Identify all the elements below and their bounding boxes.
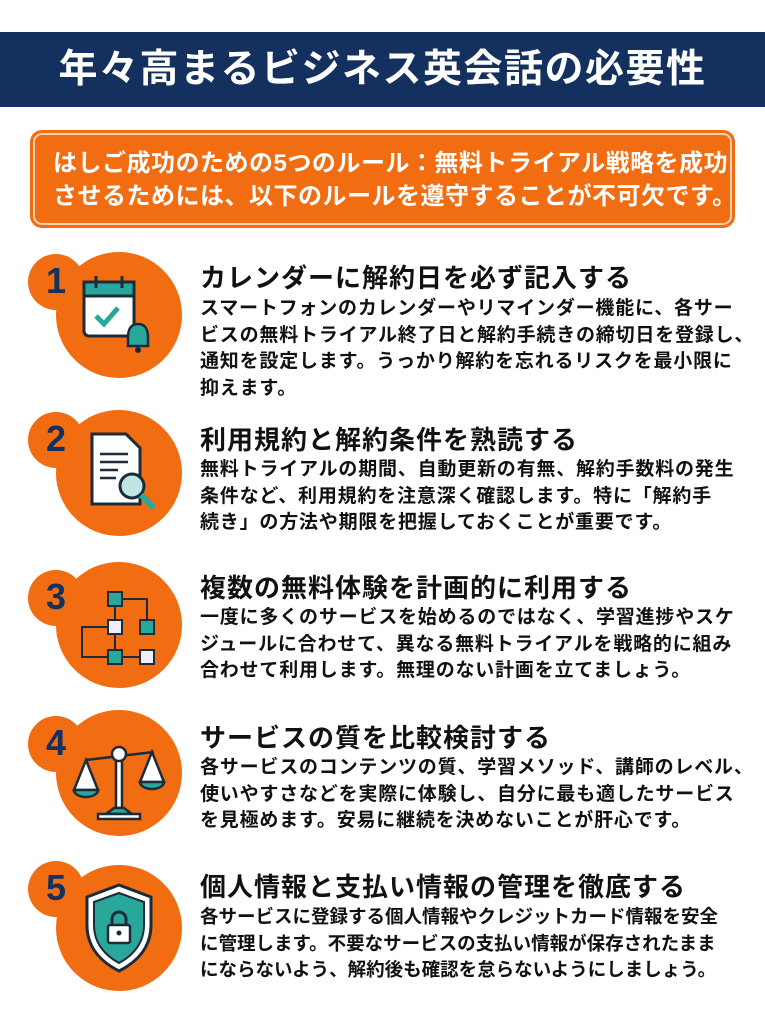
number 1: [28, 254, 84, 310]
body 2: 続き」の方法や期限を把握しておくことが重要です。: [200, 512, 672, 533]
icon: calendar: [82, 276, 150, 353]
icon: shield lock: [86, 883, 152, 973]
number 5: 5: [46, 867, 66, 908]
icon circle 1: [56, 252, 182, 378]
body 3: 合わせて利用します。無理のない計画を立てましょう。: [200, 660, 691, 681]
item 4: [28, 710, 754, 836]
body 3: ジュールに合わせて、異なる無料トライアルを戦略的に組み: [200, 634, 732, 654]
icon circle 3: [56, 562, 182, 688]
body 3: [200, 606, 735, 681]
icon circle 4: [56, 710, 182, 836]
body 2: [200, 458, 734, 533]
icon: scale: [72, 746, 166, 820]
intro callout: [30, 130, 735, 228]
intro callout: させるためには、以下のルールを遵守することが不可欠です。: [53, 183, 737, 210]
heading 4: サービスの質を比較検討する: [200, 723, 551, 753]
number 1: 1: [46, 260, 66, 301]
item 3: [28, 562, 735, 688]
item 5: [28, 861, 718, 991]
number 3: 3: [46, 576, 66, 617]
body 2: 条件など、利用規約を注意深く確認します。特に「解約手: [200, 486, 712, 506]
body 1: ビスの無料トライアル終了日と解約手続きの締切日を登録し、: [200, 324, 754, 346]
body 1: 通知を設定します。うっかり解約を忘れるリスクを最小限に: [200, 351, 733, 372]
title: 年々高まるビジネス英会話の必要性: [58, 48, 706, 91]
intro callout: はしご成功のための5つのルール：無料トライアル戦略を成功: [53, 150, 728, 177]
heading 5: 個人情報と支払い情報の管理を徹底する: [200, 872, 686, 902]
body 1: [200, 298, 754, 398]
body 5: に管理します。不要なサービスの支払い情報が保存されたまま: [200, 932, 716, 954]
body 5: [200, 906, 718, 980]
body 2: 無料トライアルの期間、自動更新の有無、解約手数料の発生: [200, 459, 734, 480]
heading 1: カレンダーに解約日を必ず記入する: [200, 263, 632, 293]
icon: flowchart: [81, 591, 155, 665]
number 5: [28, 861, 84, 917]
number 4: 4: [46, 722, 66, 763]
item 1: [28, 252, 754, 398]
icon: document search: [90, 432, 156, 510]
body 1: 抑えます。: [200, 378, 297, 398]
title: [0, 32, 765, 107]
body 4: を見極めます。安易に継続を決めないことが肝心です。: [200, 810, 691, 831]
body 4: [200, 756, 754, 831]
heading 3: 複数の無料体験を計画的に利用する: [200, 573, 632, 603]
body 5: 各サービスに登録する個人情報やクレジットカード情報を安全: [200, 906, 718, 927]
icon circle 5: [56, 865, 182, 991]
number 2: 2: [46, 418, 66, 459]
number 2: [28, 412, 84, 468]
body 3: 一度に多くのサービスを始めるのではなく、学習進捗やスケ: [200, 607, 735, 628]
body 5: にならないよう、解約後も確認を怠らないようにしましょう。: [200, 959, 716, 980]
body 1: スマートフォンのカレンダーやリマインダー機能に、各サー: [200, 298, 733, 319]
heading 2: 利用規約と解約条件を熟読する: [200, 425, 578, 455]
number 4: [28, 716, 84, 772]
number 3: [28, 570, 84, 626]
body 4: 各サービスのコンテンツの質、学習メソッド、講師のレベル、: [200, 757, 754, 778]
body 4: 使いやすさなどを実際に体験し、自分に最も適したサービス: [200, 784, 735, 804]
icon circle 2: [56, 410, 182, 536]
item 2: [28, 410, 734, 536]
